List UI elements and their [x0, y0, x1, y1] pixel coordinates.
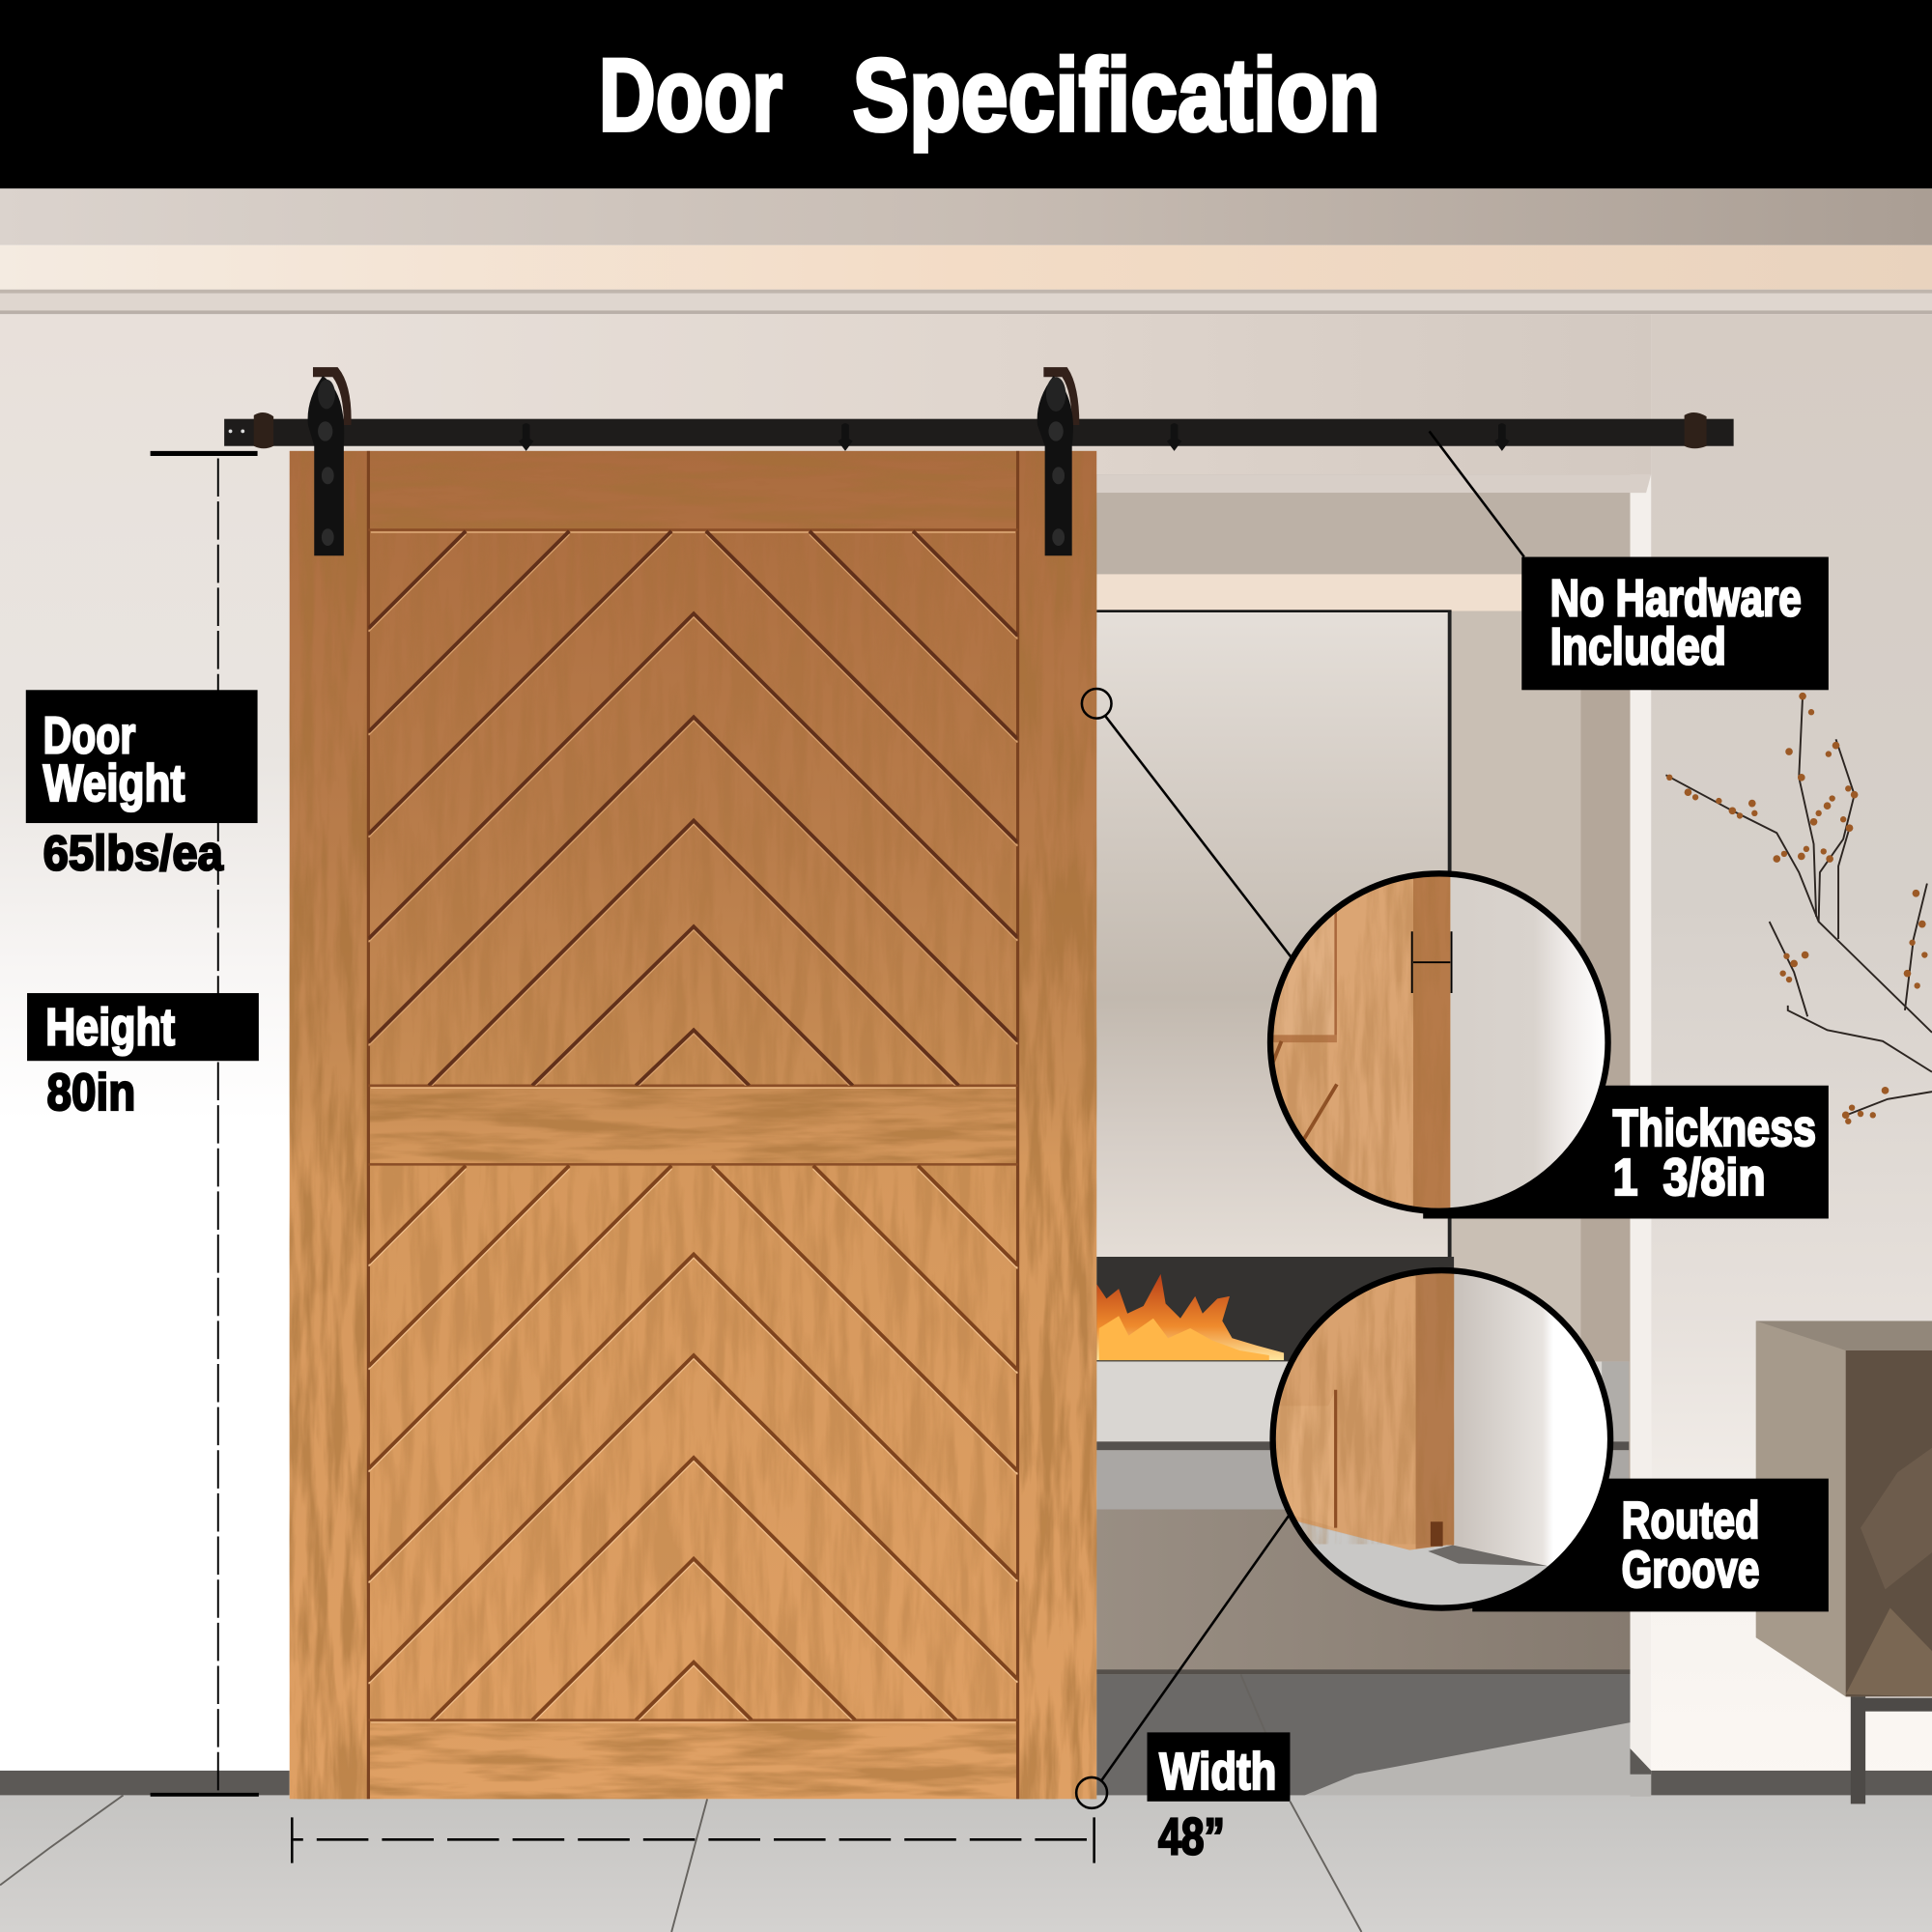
label: height [27, 993, 259, 1061]
left hanger strap [308, 367, 352, 555]
width dimension line [292, 1817, 1094, 1863]
label: no hardware included [1521, 557, 1829, 690]
width text: Width [1159, 1744, 1276, 1801]
decorative branch with berries [1665, 693, 1932, 1124]
value: 65lbs/ea: 65lbs/ea [43, 826, 223, 881]
label: door weight: Weight [43, 755, 185, 812]
label: thickness: 1 3/8in [1613, 1150, 1766, 1207]
thickness marker [1412, 931, 1452, 993]
cabinet [1756, 1321, 1932, 1696]
leader lines [1076, 431, 1524, 1808]
detail circle: thickness [1269, 868, 1608, 1220]
cabinet legs [1851, 1696, 1932, 1804]
doorway opening and interior room [1096, 474, 1651, 1771]
label: width [1148, 1732, 1290, 1802]
label: door weight [26, 690, 258, 823]
label: door weight: Door [43, 707, 135, 764]
height dimension line [151, 453, 259, 1795]
label: thickness: Thickness [1613, 1100, 1816, 1157]
value: 48 inches: 48” [1158, 1809, 1225, 1866]
title: Door [599, 37, 782, 153]
value: 80in: 80in [46, 1065, 135, 1122]
label: no hardware included: No Hardware [1550, 571, 1802, 628]
label: routed groove [1472, 1479, 1829, 1611]
label: thickness [1423, 1086, 1829, 1218]
fireplace flames [1096, 1274, 1284, 1360]
title banner [0, 0, 1932, 188]
lower chevron panel [368, 1166, 1018, 1723]
label: height: Height [45, 1000, 175, 1057]
label: routed groove: Routed [1622, 1492, 1759, 1549]
track stops [254, 412, 1707, 448]
right hanger strap [1037, 367, 1079, 555]
detail circle: routed groove [1269, 1266, 1627, 1627]
sliding track [224, 412, 1734, 451]
label: no hardware included: Included [1550, 618, 1726, 675]
barn door [290, 451, 1096, 1799]
floor [0, 1674, 1932, 1932]
upper chevron panel [368, 531, 1018, 1089]
frame joints [368, 451, 1018, 1799]
title: Specification [853, 37, 1380, 153]
track bolts [519, 423, 1510, 451]
door wood grain [290, 451, 1096, 1799]
label: routed groove: Groove [1622, 1542, 1759, 1599]
